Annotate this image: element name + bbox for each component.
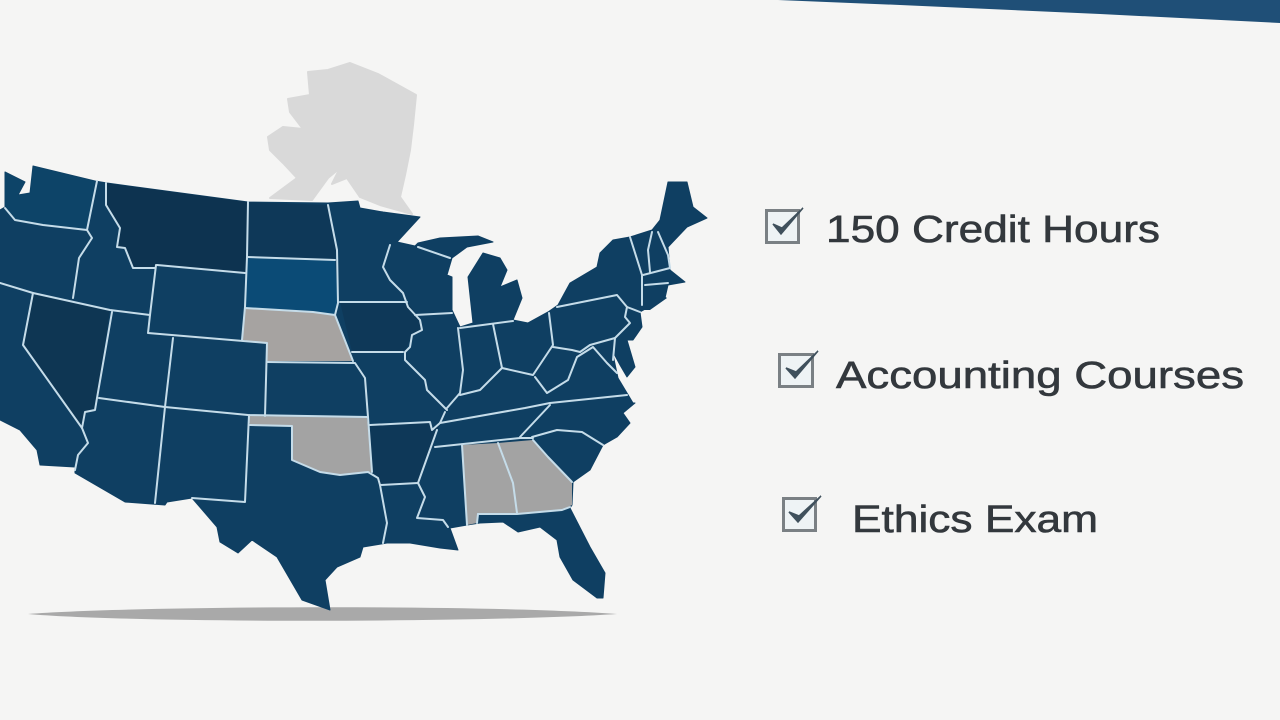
icon: checkbox 2 [780, 351, 818, 386]
checklist item: Ethics Exam [784, 496, 1098, 541]
top right corner banner [778, 0, 1280, 23]
label: Ethics Exam: Ethics Exam [852, 499, 1098, 541]
label: 150 Credit Hours: 150 Credit Hours [826, 209, 1160, 251]
state: Arkansas (darker) [370, 422, 440, 485]
state: Oklahoma (gray) [248, 416, 372, 475]
map ground shadow [28, 607, 617, 621]
state: Iowa (darker) [340, 302, 422, 352]
state: Nebraska (gray) [242, 308, 353, 361]
state: Georgia (gray) [498, 440, 572, 514]
state: Nevada (darker) [23, 293, 110, 428]
checklist item: Accounting Courses [780, 351, 1244, 397]
state: Washington (lighter) [5, 166, 95, 230]
state: South Dakota (lighter) [245, 257, 338, 315]
map outline of contiguous states [0, 166, 707, 610]
state: North Dakota (darker) [247, 202, 337, 260]
map: United States [0, 166, 707, 610]
state: Long Island [643, 296, 667, 310]
icon: checkbox 3 [784, 496, 821, 530]
state border lines [0, 181, 670, 543]
icon: checkbox 1 [766, 208, 803, 242]
state: Alabama (gray) [462, 443, 517, 525]
state: Montana (dark) [106, 183, 248, 273]
label: Accounting Courses: Accounting Courses [836, 355, 1244, 397]
icon: Alaska silhouette [268, 63, 416, 214]
checklist item: 150 Credit Hours [766, 208, 1160, 251]
